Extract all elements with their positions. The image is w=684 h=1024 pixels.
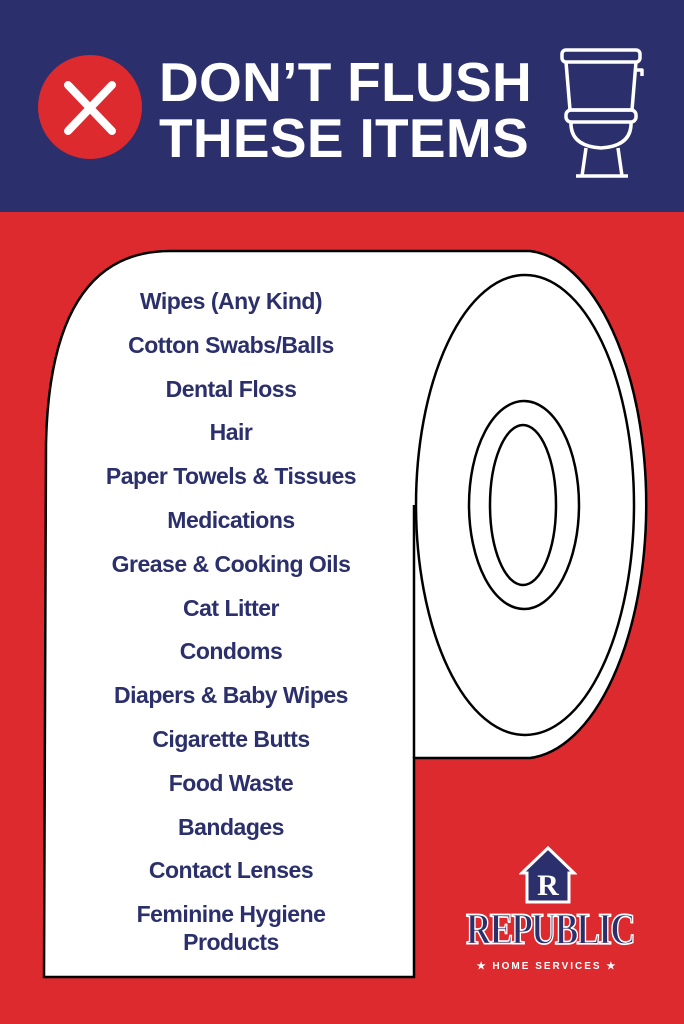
list of items: Grease & Cooking Oils bbox=[112, 551, 350, 577]
list of items: Diapers & Baby Wipes bbox=[114, 682, 348, 708]
title line 1: DON’T FLUSH bbox=[159, 51, 532, 113]
list of items: Medications bbox=[167, 507, 295, 533]
list of items: Condoms bbox=[180, 638, 282, 664]
icon: toilet bbox=[560, 48, 644, 178]
icon: red X circle bbox=[38, 55, 142, 159]
title line 2: THESE ITEMS bbox=[159, 107, 529, 169]
list of items: Cotton Swabs/Balls bbox=[128, 332, 334, 358]
list of items: Products bbox=[183, 929, 279, 955]
logo: Republic Home Services bbox=[466, 846, 634, 972]
icon: house: R bbox=[537, 869, 559, 902]
list of items: Cat Litter bbox=[183, 595, 279, 621]
list of items: Dental Floss bbox=[166, 376, 296, 402]
list of items: Wipes (Any Kind) bbox=[140, 288, 322, 314]
list of items: Contact Lenses bbox=[149, 857, 313, 883]
list of items: Paper Towels & Tissues bbox=[106, 463, 356, 489]
logo tagline: ★ HOME SERVICES ★ bbox=[477, 961, 617, 972]
list of items: Cigarette Butts bbox=[152, 726, 310, 752]
list of items: Food Waste bbox=[169, 770, 293, 796]
icon: house bbox=[519, 846, 577, 904]
list of items: Feminine Hygiene bbox=[137, 901, 325, 927]
logo wordmark: REPUBLIC bbox=[466, 904, 634, 953]
list of items: Hair bbox=[210, 419, 252, 445]
list of items bbox=[106, 288, 356, 955]
header band bbox=[0, 0, 684, 212]
list of items: Bandages bbox=[178, 814, 284, 840]
